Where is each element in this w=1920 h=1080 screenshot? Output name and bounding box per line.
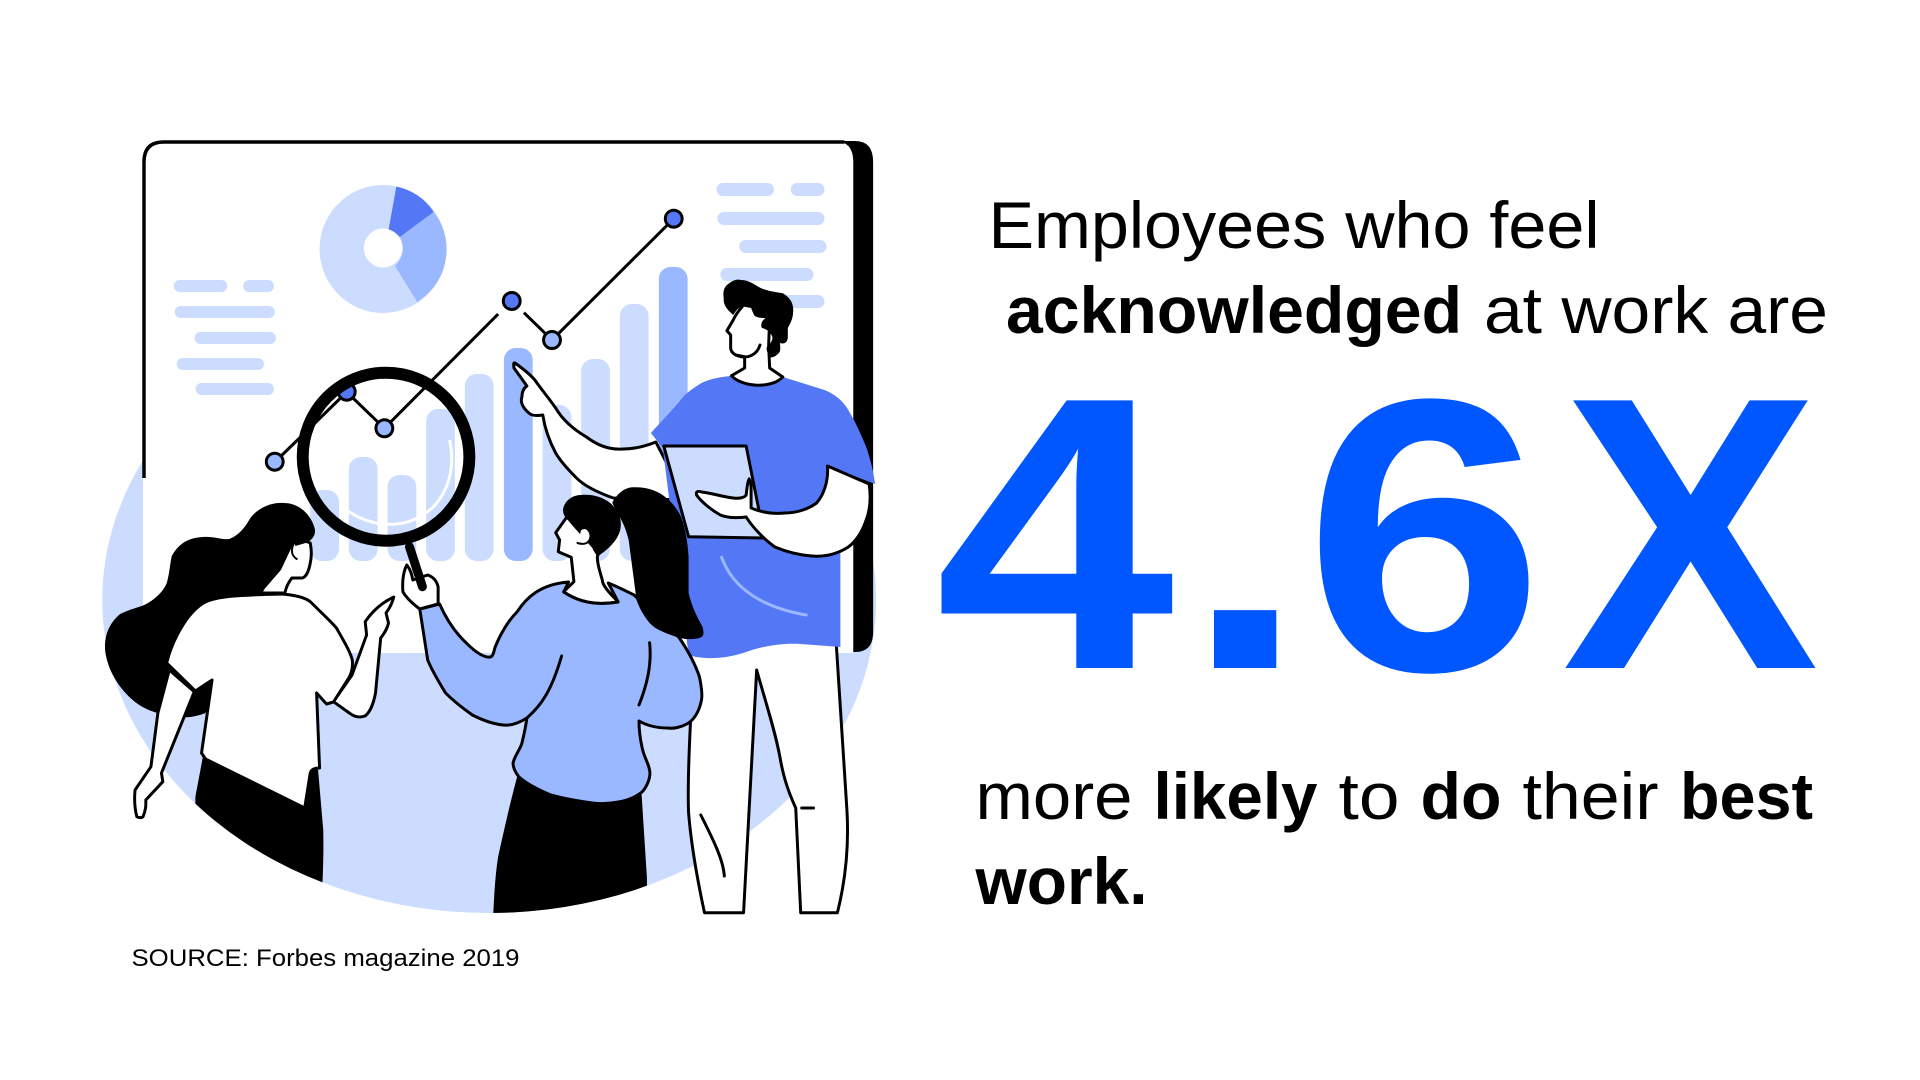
intro text line 2 xyxy=(1006,273,1828,347)
intro text line 2: acknowledged xyxy=(1006,273,1462,347)
woman 1: left arm xyxy=(135,670,194,818)
man: t-shirt xyxy=(651,376,875,658)
closing text line 1: to xyxy=(1338,759,1400,833)
magnifier handle xyxy=(409,547,422,587)
woman 2: sleeve folds xyxy=(527,643,650,718)
background circle xyxy=(102,287,876,913)
man: smile xyxy=(736,345,760,357)
closing text line 1: best xyxy=(1680,759,1813,833)
woman 1: face xyxy=(261,535,311,593)
illustration: team analysing data xyxy=(102,141,876,920)
woman 1: raised hand xyxy=(333,597,394,717)
woman 2: ponytail xyxy=(612,487,703,639)
pie chart xyxy=(320,185,447,313)
man: hair xyxy=(723,280,793,357)
man with clipboard xyxy=(514,280,875,913)
woman 2: hand xyxy=(403,565,438,609)
woman 1: hair xyxy=(105,503,315,717)
closing text line 1 xyxy=(976,759,1813,833)
woman 2: skirt xyxy=(493,770,647,920)
man: shirt crease xyxy=(722,557,806,615)
woman 2: ear xyxy=(577,528,591,544)
intro text line 2: at work are xyxy=(1484,273,1828,347)
text lines right xyxy=(716,183,826,308)
woman with long hair xyxy=(105,503,394,890)
big statistic 4.6X: 6 xyxy=(1304,319,1544,753)
big statistic 4.6X xyxy=(935,316,1821,753)
intro text line 1: Employees who feel xyxy=(988,188,1600,262)
bar chart xyxy=(310,267,688,561)
man: holding arm xyxy=(696,466,870,556)
woman 2: front hair xyxy=(563,495,621,557)
woman 2: sweater xyxy=(420,582,702,804)
big statistic 4.6X: 4 xyxy=(935,316,1177,750)
presentation board xyxy=(143,141,873,653)
closing text line 2: work. xyxy=(975,844,1148,918)
closing text line 1: likely xyxy=(1154,759,1318,833)
man: trouser creases xyxy=(701,808,814,876)
magnifying glass xyxy=(303,373,469,541)
big statistic 4.6X: . xyxy=(1184,316,1307,751)
source note: SOURCE: Forbes magazine 2019 xyxy=(132,945,520,972)
big statistic 4.6X: X xyxy=(1562,317,1821,751)
closing text line 1: do xyxy=(1420,759,1502,833)
woman 1: ear xyxy=(292,542,297,559)
line chart xyxy=(266,210,682,470)
man: neck and face xyxy=(727,305,783,385)
closing text line 1: more xyxy=(976,759,1132,833)
woman 1: pants xyxy=(195,755,323,890)
man: pointing arm xyxy=(514,363,686,500)
woman 1: t-shirt xyxy=(167,594,353,808)
text lines left xyxy=(174,280,276,395)
woman 2: neck and face xyxy=(556,518,618,603)
woman with ponytail xyxy=(403,487,703,920)
closing text line 1: their xyxy=(1522,759,1658,833)
man: clipboard xyxy=(664,446,764,538)
man: trousers xyxy=(688,640,848,913)
